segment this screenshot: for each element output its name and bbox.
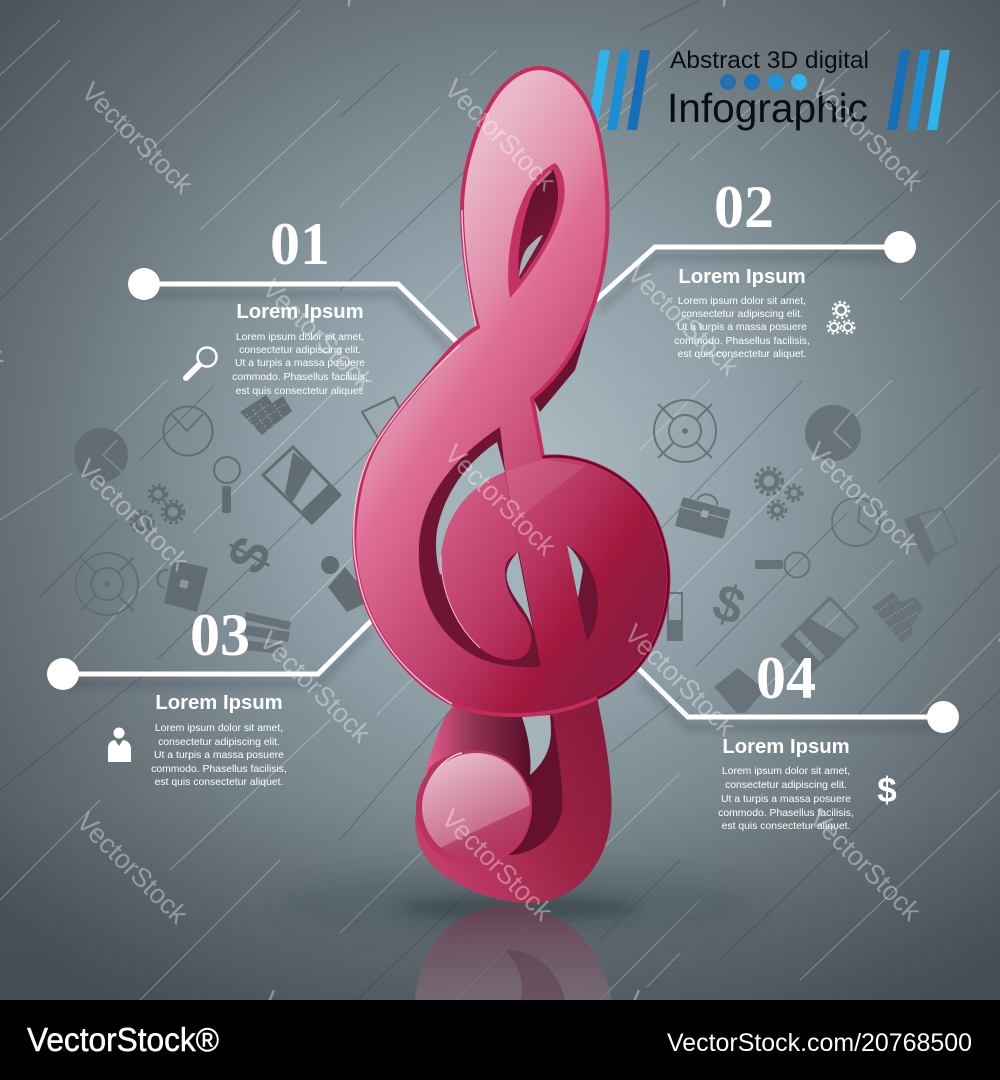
- watermarks: VectorStock: [253, 625, 377, 749]
- icon: dollar: $: [705, 573, 752, 637]
- text block 03: consectetur adipiscing elit.: [158, 737, 280, 748]
- clef spiral gap: [436, 442, 505, 575]
- footer logo: VectorStock®: [27, 1021, 219, 1058]
- icon: person: [714, 668, 765, 713]
- text block 01: Lorem ipsum dolor sit amet,: [236, 332, 364, 343]
- icon: target: [76, 553, 138, 615]
- text block 01: commodo. Phasellus facilisis,: [232, 372, 368, 383]
- icon: pie chart: [805, 405, 861, 461]
- floor shadow: [278, 869, 758, 941]
- clef gloss: [441, 459, 585, 578]
- icon: gears: [756, 468, 802, 519]
- title line 2: Infographic: [667, 85, 868, 131]
- panel: 03: [108, 602, 287, 788]
- connector 03: [47, 618, 374, 690]
- text block 02: est quis consectetur aliquet.: [678, 349, 806, 360]
- treble clef reflection: [415, 906, 612, 1000]
- watermarks: VectorStock: [438, 73, 562, 197]
- panel: 04: [718, 645, 897, 832]
- watermarks: VectorStock: [70, 806, 194, 930]
- clef stem gap: [522, 715, 551, 775]
- heading 02: Lorem Ipsum: [678, 266, 806, 288]
- connector 01: [128, 268, 460, 345]
- text block 02: Ut a turpis a massa posuere: [677, 322, 807, 333]
- icon: laptop: [905, 508, 958, 565]
- watermarks: VectorStock: [438, 438, 562, 562]
- icon: calculator: [872, 592, 923, 643]
- clef right dark rim: [543, 456, 668, 698]
- clef head cylinder: [424, 704, 532, 790]
- text block 04: commodo. Phasellus facilisis,: [718, 808, 854, 819]
- number 04: 04: [756, 645, 816, 711]
- text block 02: Lorem ipsum dolor sit amet,: [678, 296, 806, 307]
- watermarks: VectorStock: [805, 73, 929, 197]
- icon: laptop outline: [362, 397, 404, 438]
- icon: briefcase: [157, 560, 208, 612]
- icon: clock: [832, 498, 880, 546]
- text block 04: est quis consectetur aliquet.: [722, 821, 850, 832]
- icon: tablet: [782, 598, 858, 673]
- icon: magnifier: [214, 457, 240, 513]
- clef spiral hole: [419, 427, 541, 667]
- heading 03: Lorem Ipsum: [155, 692, 283, 714]
- right blue bars: [887, 50, 950, 130]
- text block 01: est quis consectetur aliquet.: [236, 386, 364, 397]
- icon: clock: [164, 406, 212, 456]
- footer band: [0, 1000, 1000, 1080]
- icon: dollar: $: [214, 527, 284, 583]
- panel: 01: [186, 211, 368, 397]
- watermarks: VectorStock: [71, 453, 195, 577]
- text block 03: Ut a turpis a massa posuere: [154, 750, 284, 761]
- icon: white person: [108, 728, 131, 762]
- text block 02: commodo. Phasellus facilisis,: [674, 336, 810, 347]
- text block 03: Lorem ipsum dolor sit amet,: [155, 723, 283, 734]
- clef left rim highlight: [354, 210, 476, 704]
- number 03: 03: [190, 602, 250, 668]
- text block 01: Ut a turpis a massa posuere: [235, 358, 365, 369]
- watermarks: VectorStock: [75, 76, 199, 200]
- watermarks: VectorStock: [803, 803, 927, 927]
- clef stem inner shadow: [508, 716, 562, 855]
- watermarks: VectorStock: [621, 258, 745, 382]
- icon: calculator: [240, 395, 292, 438]
- connector 04: [637, 667, 959, 733]
- clef spiral island: [441, 472, 531, 660]
- clef island rim highlight: [441, 555, 480, 648]
- connector lines: [47, 231, 959, 733]
- icon: gears: [131, 485, 184, 533]
- clef head disc: [416, 750, 532, 866]
- icon: binder: [668, 593, 682, 640]
- text block 03: est quis consectetur aliquet.: [155, 777, 283, 788]
- icon: target: [654, 400, 716, 462]
- number 02: 02: [714, 174, 774, 240]
- icon: folders: [245, 612, 291, 654]
- clef back extrusion: [533, 320, 590, 412]
- panel: 02: [674, 174, 854, 360]
- heading 01: Lorem Ipsum: [236, 301, 364, 323]
- text block 03: commodo. Phasellus facilisis,: [151, 764, 287, 775]
- clef lower stem: [415, 696, 612, 903]
- icon: person: [321, 556, 372, 612]
- clef right hole: [567, 545, 598, 642]
- grey background icons: left group: [74, 395, 404, 654]
- text block 01: consectetur adipiscing elit.: [239, 345, 361, 356]
- icon: white magnifier: [186, 348, 216, 378]
- icon: briefcase: [675, 488, 733, 539]
- clef middle gap: [507, 552, 533, 630]
- clef upper hole: [508, 163, 565, 298]
- watermarks: VectorStock: [801, 436, 925, 560]
- watermarks: VectorStock: [435, 803, 559, 927]
- grey background icons: right group: [654, 400, 958, 713]
- text block 04: Lorem ipsum dolor sit amet,: [722, 766, 850, 777]
- watermarks: VectorStock: [618, 618, 742, 742]
- title block: [587, 47, 950, 131]
- title line 1: Abstract 3D digital: [670, 47, 869, 74]
- text block 04: Ut a turpis a massa posuere: [721, 794, 851, 805]
- icon: magnifier: [755, 552, 810, 578]
- connector 02: [596, 231, 916, 300]
- heading 04: Lorem Ipsum: [722, 736, 850, 758]
- text block 04: consectetur adipiscing elit.: [725, 780, 847, 791]
- icon: white gears: [828, 302, 854, 334]
- left blue bars: [587, 50, 650, 130]
- number 01: 01: [270, 211, 330, 277]
- clef main face: [354, 68, 668, 715]
- icon: pie chart: [74, 428, 128, 482]
- icon: white dollar: $: [877, 771, 897, 810]
- treble clef: [354, 68, 668, 903]
- icon: tablet: [263, 447, 340, 523]
- title dots: [720, 74, 807, 90]
- text block 02: consectetur adipiscing elit.: [681, 309, 803, 320]
- footer url: VectorStock.com/20768500: [667, 1030, 972, 1057]
- watermarks: VectorStock: [256, 273, 380, 397]
